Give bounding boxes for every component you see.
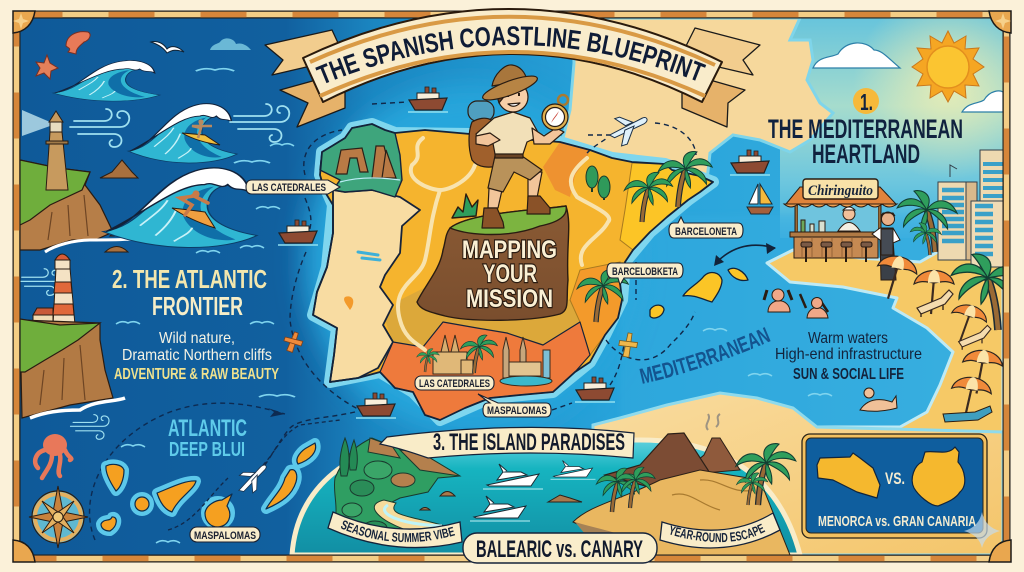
right ribbon tail lower [682,72,745,127]
chiringuito bar [784,187,897,262]
ribbon: year-round escape [659,512,781,549]
lower cliff [20,319,113,418]
wind four [70,415,109,439]
pill: Maspalomas Spain [478,394,551,417]
corner: bottom left [13,540,35,562]
mountain heading: MISSION [466,285,553,313]
seagull [151,41,184,53]
lounger two [959,325,991,350]
hat brim [480,72,540,104]
region: Portugal [313,190,420,382]
dune shadow [575,522,655,555]
bartender [838,207,860,231]
cathedral: twin spires [500,337,552,386]
upper lighthouse [46,111,68,190]
yacht three [470,496,530,521]
dunes [573,470,790,555]
route across Atlantic [90,403,285,540]
corner: top right [989,11,1011,33]
heading: Atlantic frontier: 2. THE ATLANTIC [112,264,267,294]
Canary islands [101,443,316,531]
scroll inner stripe top [310,17,715,65]
peninsula base [320,131,632,376]
wind three [19,269,60,295]
shorts [488,156,542,192]
shirt [476,112,540,154]
Canary islands halos [101,443,316,531]
Menorca shape [817,453,880,498]
far leg [528,172,542,198]
orange plane: Murcia [618,332,638,358]
double arrow head right [766,243,776,254]
right sea [620,215,1003,435]
Mediterranean beach [765,248,1002,430]
region: Navarra [543,142,590,197]
cathedral palm [460,335,497,373]
upper cliff [20,160,113,250]
region: island scene [292,414,800,555]
hat crown [492,65,527,86]
umbrella five [947,374,993,423]
France land [560,18,833,180]
eyes [508,93,519,97]
rock islet small [105,230,132,252]
dune ridges [672,480,755,510]
text: Mediterranean description: High-end infrastructure [775,346,922,363]
region: Catalonia [620,163,713,250]
heading: Mediterranean heartland [768,114,963,169]
pill: Maspalomas Canaries: MASPALOMAS [194,530,256,542]
right ribbon tail upper [680,28,760,75]
main scroll [303,9,722,102]
heading: Mediterranean heartland: HEARTLAND [812,139,920,169]
dotted flight path [168,420,340,530]
comparison box [802,434,987,538]
grass tuft [452,194,478,218]
bedroll [468,101,494,121]
heading: Atlantic frontier [112,264,267,321]
umbrella one [871,252,920,303]
compass [542,95,568,130]
mountain heading: MAPPING [462,236,557,264]
palm: beach right [951,254,1024,330]
ribbon: seasonal summer vibe [327,511,463,548]
near leg [488,188,502,208]
orange plane: Portugal [283,331,304,353]
sailboat [747,184,773,214]
arm [532,128,564,144]
region: Valencia [570,262,622,355]
buildings [938,150,1004,267]
lounger three [943,406,992,422]
pill: Barceloneta: BARCELONETA [675,226,737,238]
yacht one [483,464,543,489]
sea stacks: Las Catedrales [336,146,400,182]
lower lighthouse [33,254,75,326]
coastal halo of Spain [313,124,713,420]
text: Mediterranean description [775,330,922,383]
dune palm two [615,467,655,508]
pill: Barceloneta [669,217,743,238]
pill: Balearic vs Canary: BALEARIC vs. CANARY [476,536,643,563]
ripples [116,69,295,543]
fore arm [476,133,500,146]
double arrow head left [714,255,724,266]
pill: Las Catedrales north: LAS CATEDRALES [252,182,326,194]
compass rose [29,486,88,548]
left lush island [330,438,460,545]
text: Atlantic description: ADVENTURE & RAW BEAUTY [114,366,279,383]
double arrow [716,245,775,263]
waiter [872,212,900,280]
text: Mediterranean description: Warm waters [808,330,888,347]
sky [780,18,1003,238]
label: Atlantic deep blue: ATLANTIC [168,415,247,442]
fish [66,32,90,54]
left ribbon tail upper [265,30,345,75]
chiringuito sign: Chiringuito [808,183,873,199]
medium surfer [182,119,220,145]
surf at upper cliff [45,238,142,252]
label: Atlantic deep blue [168,415,247,461]
island scene water [292,440,800,555]
mountain heading: YOUR [483,260,537,288]
cloud one [813,43,900,68]
route lines [265,102,696,465]
backpack [469,118,500,167]
ship: Balearic [730,150,770,175]
yacht two [550,460,596,479]
palm: hotel small [910,223,942,255]
medium wave [128,104,237,163]
dune palm one [596,468,639,512]
rocks [420,492,582,510]
volcano main [605,433,712,490]
vs mark: VS. [885,469,905,488]
watermark sparkle [964,512,1000,548]
heading: island paradises: 3. THE ISLAND PARADISES [433,429,625,456]
airplane: Canaries [232,458,274,499]
palm near cathedral [417,349,439,372]
region: Andalusia [380,322,590,420]
ship: Galicia [278,220,318,245]
text: Atlantic description [114,330,279,383]
Portugal river marks [358,252,380,260]
hair [497,86,508,103]
Portugal marker [344,296,353,310]
wind one [70,109,129,147]
belt [495,153,523,158]
pill: Las Catedrales south [415,376,494,390]
surf at lower cliff [30,398,125,418]
text: Atlantic description: Dramatic Northern cliffs [122,347,272,364]
mountain stump [417,194,569,320]
head [498,82,528,112]
palm: hotel large [897,191,957,252]
ripples in Mediterranean [703,329,832,396]
big wave [103,168,257,248]
heading: Atlantic frontier: FRONTIER [152,291,243,321]
text: Atlantic description: Wild nature, [159,330,235,347]
explorer [468,65,568,228]
central plateau [386,288,579,346]
pill: Maspalomas Spain: MASPALOMAS [487,405,547,417]
peninsula outline [313,124,713,420]
label: Atlantic deep blue: DEEP BLUI [169,439,245,461]
mountain heading [462,236,557,313]
airplane: north [609,116,648,147]
left boot [482,208,504,228]
umbrella four [960,348,1004,396]
right resort scene [650,31,1024,423]
sun glow [862,18,1002,173]
pill: Maspalomas Canaries [190,527,260,542]
pill: Barcelobketa [607,263,683,285]
pill: Balearic vs Canary [463,533,657,563]
starfish [36,55,58,79]
left bay [384,505,442,526]
island banner [380,427,634,458]
umbrella two [914,270,954,314]
big surfer [172,190,215,228]
sun [912,31,984,102]
left coast scene [19,32,340,548]
banner ribbon [380,427,634,458]
palm: Catalonia west [624,172,673,222]
ribbon: year-round escape: YEAR-ROUND ESCAPE [670,524,766,542]
roads [398,138,609,350]
cloud two [962,91,1003,112]
palm: Valencia [577,269,628,322]
small wave [53,60,160,101]
corner: top left [13,11,35,33]
umbrella three [945,301,990,348]
rock islet [100,160,138,178]
ship: Cantabrian [408,87,448,112]
pill: Barcelobketa: BARCELOBKETA [612,266,678,278]
dune palm small [736,473,768,505]
corner: bottom right [989,540,1011,562]
volcano smoke [706,414,720,430]
wind two [230,104,289,142]
palm: Catalonia east [658,151,712,207]
lounger one [917,290,953,317]
ship: Cadiz [356,393,396,418]
title: THE SPANISH COASTLINE BLUEPRINT [315,26,706,84]
small cloud [210,38,251,50]
badge: one: 1. [860,89,873,115]
cathedral: Burgos [433,335,473,374]
left ribbon tail lower [280,72,345,127]
text: Mediterranean description: SUN & SOCIAL LIFE [793,366,904,383]
badge: one [853,88,879,115]
trees [586,166,610,200]
title banner [264,8,761,128]
swimmers [764,289,897,411]
coastal glow [290,82,551,432]
balearic islands [650,268,748,318]
volcano back [680,438,740,475]
label: Mediterranean sea: MEDITERRANEAN [640,327,770,384]
ribbon: seasonal summer vibe: SEASONAL SUMMER VIBE [341,520,455,542]
smile [508,103,520,106]
octopus [35,434,71,478]
region: Galicia [320,124,402,197]
pill: Las Catedrales south: LAS CATEDRALES [419,378,490,390]
route arrow [268,408,285,417]
dune palm tall [736,444,796,505]
southern sand shore [593,393,1003,555]
ship: Alboran [575,377,615,402]
right boot [527,196,550,214]
lighthouse beam [22,110,50,136]
scroll inner stripe bottom [320,52,705,96]
Gran Canaria shape [912,447,965,506]
